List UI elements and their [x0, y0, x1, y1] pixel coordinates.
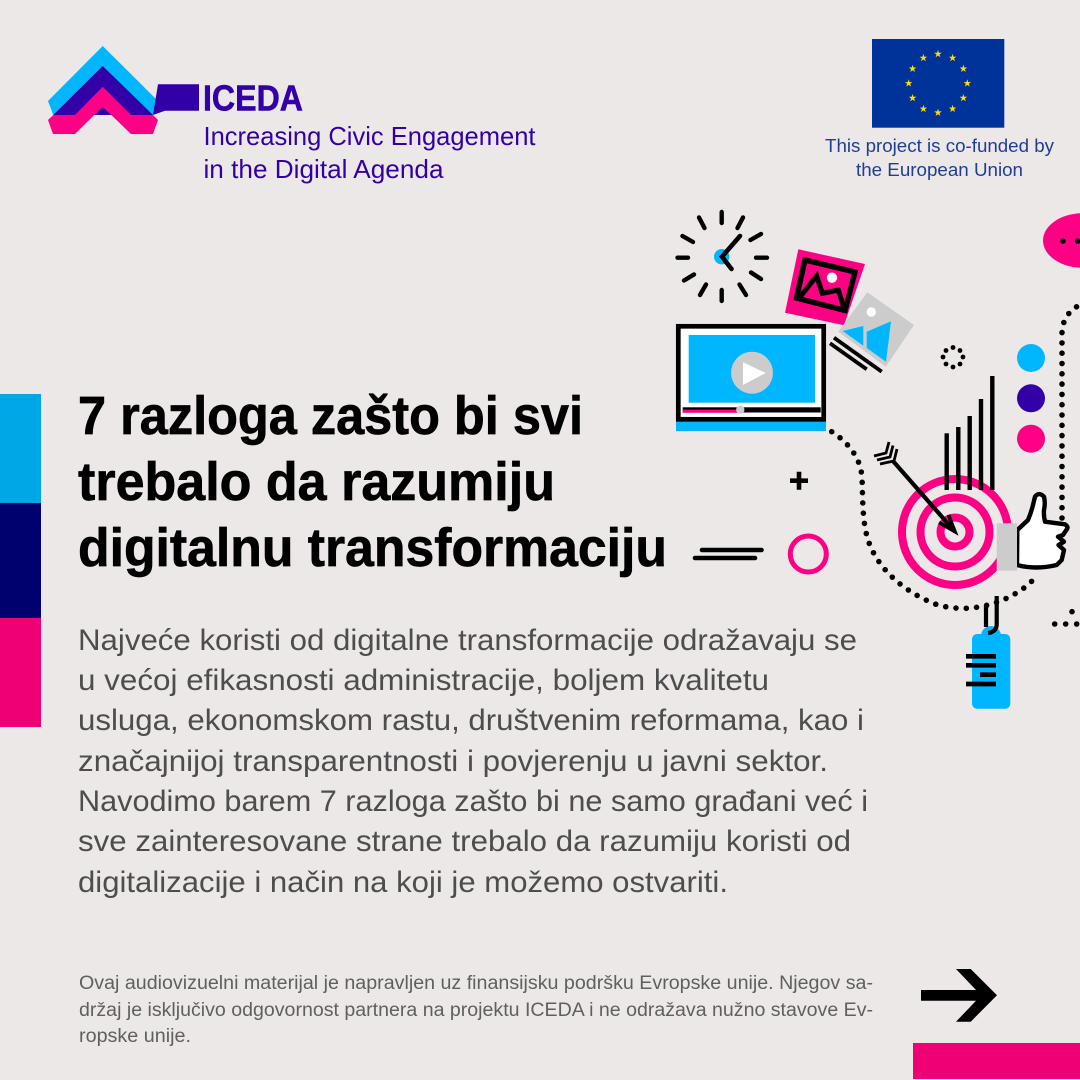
- left colour stripe: [0, 394, 41, 727]
- icon: clock: [678, 212, 767, 301]
- logo tagline: [204, 121, 536, 184]
- body paragraph: sve zainteresovane strane trebalo da razumiju koristi od: [78, 825, 851, 858]
- icon: hanging tag: [966, 596, 1010, 709]
- bar chart: [944, 376, 994, 490]
- dotted connector: video to tag: [832, 432, 1038, 608]
- arrow: next: [921, 969, 997, 1022]
- double dash: [695, 550, 762, 558]
- icon: plus: [790, 472, 808, 490]
- body paragraph: [78, 624, 868, 899]
- EU funding caption: This project is co-funded by: [825, 135, 1055, 156]
- icon: thumbs up: [997, 494, 1067, 571]
- logo mark: layered chevrons: [48, 46, 199, 134]
- icon: pink ring: [790, 536, 826, 572]
- icon: pink picture: [785, 249, 865, 325]
- EU funding caption: [825, 135, 1055, 180]
- body paragraph: usluga, ekonomskom rastu, društvenim reformama, kao i: [78, 704, 864, 737]
- body paragraph: Najveće koristi od digitalne transformacije odražavaju se: [78, 624, 857, 657]
- title: 7 razloga zašto bi svi: [78, 386, 583, 446]
- icon: grey picture: [830, 292, 914, 372]
- logo tagline: in the Digital Agenda: [204, 154, 444, 184]
- body paragraph: Navodimo barem 7 razloga zašto bi ne samo građani već i: [78, 785, 868, 818]
- body paragraph: u većoj efikasnosti administracije, boljem kvalitetu: [78, 664, 769, 697]
- icon: EU flag: [872, 39, 1004, 128]
- disclaimer: držaj je isključivo odgovornost partnera na projektu ICEDA i ne odražava nužno stavove Ev-: [79, 1000, 873, 1021]
- logo tagline: Increasing Civic Engagement: [204, 121, 536, 151]
- disclaimer: [79, 973, 873, 1047]
- icon: target: [902, 479, 1008, 585]
- disclaimer: ropske unije.: [79, 1026, 191, 1047]
- icon: arrow in target: [874, 442, 955, 532]
- illustration: digital icons: [676, 212, 1080, 709]
- logo wordmark: ICEDA: [203, 78, 303, 118]
- title: digitalnu transformaciju: [78, 518, 667, 578]
- body paragraph: značajnijoj transparentnosti i povjerenju u javni sektor.: [78, 745, 828, 778]
- title: [78, 386, 667, 578]
- icon: video player: [676, 326, 826, 431]
- disclaimer: Ovaj audiovizuelni materijal je napravljen uz finansijsku podršku Evropske unije. Njegov sa-: [79, 973, 873, 994]
- scattered dots: [1052, 609, 1079, 627]
- title: trebalo da razumiju: [78, 452, 555, 512]
- dotted connector: right edge: [1062, 306, 1078, 518]
- pink corner block: [913, 1043, 1080, 1079]
- speech bubble: [1043, 213, 1080, 268]
- EU funding caption: the European Union: [856, 159, 1023, 180]
- palette dots: [1017, 344, 1045, 453]
- body paragraph: digitalizacije i način na koji je možemo ostvariti.: [78, 866, 728, 899]
- EU funding badge: [825, 39, 1055, 180]
- dot ring: [941, 345, 965, 369]
- ICEDA logo: [48, 46, 536, 184]
